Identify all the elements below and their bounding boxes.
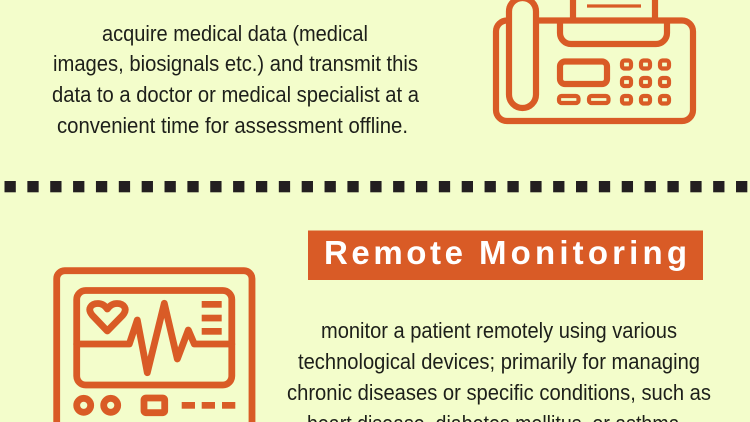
dotted section divider [4, 181, 747, 192]
text block: store and forward description [52, 21, 420, 138]
monitor readouts and dashes [182, 301, 235, 409]
icon: patient monitor [57, 271, 252, 422]
text block: remote monitoring description [287, 318, 711, 422]
round knobs [77, 398, 91, 412]
text block: remote monitoring description: technological devices; primarily for managing [298, 349, 700, 374]
heading: Remote Monitoring [308, 230, 703, 280]
text block: store and forward description: data to a doctor or medical specialist at a [52, 82, 420, 107]
text block: store and forward description: acquire medical data (medical [102, 21, 368, 46]
ECG trace [77, 303, 232, 373]
heading: Remote Monitoring: Remote [324, 234, 463, 271]
text block: store and forward description: convenient time for assessment offline. [57, 113, 408, 138]
icon: fax machine [496, 0, 693, 121]
button [144, 398, 165, 413]
text block: store and forward description: images, biosignals etc.) and transmit this [53, 51, 418, 76]
text block: remote monitoring description: chronic diseases or specific conditions, such as [287, 380, 711, 405]
heading: Remote Monitoring: Monitoring [479, 234, 687, 271]
heart [90, 304, 125, 331]
text block: remote monitoring description: monitor a patient remotely using various [321, 318, 677, 343]
